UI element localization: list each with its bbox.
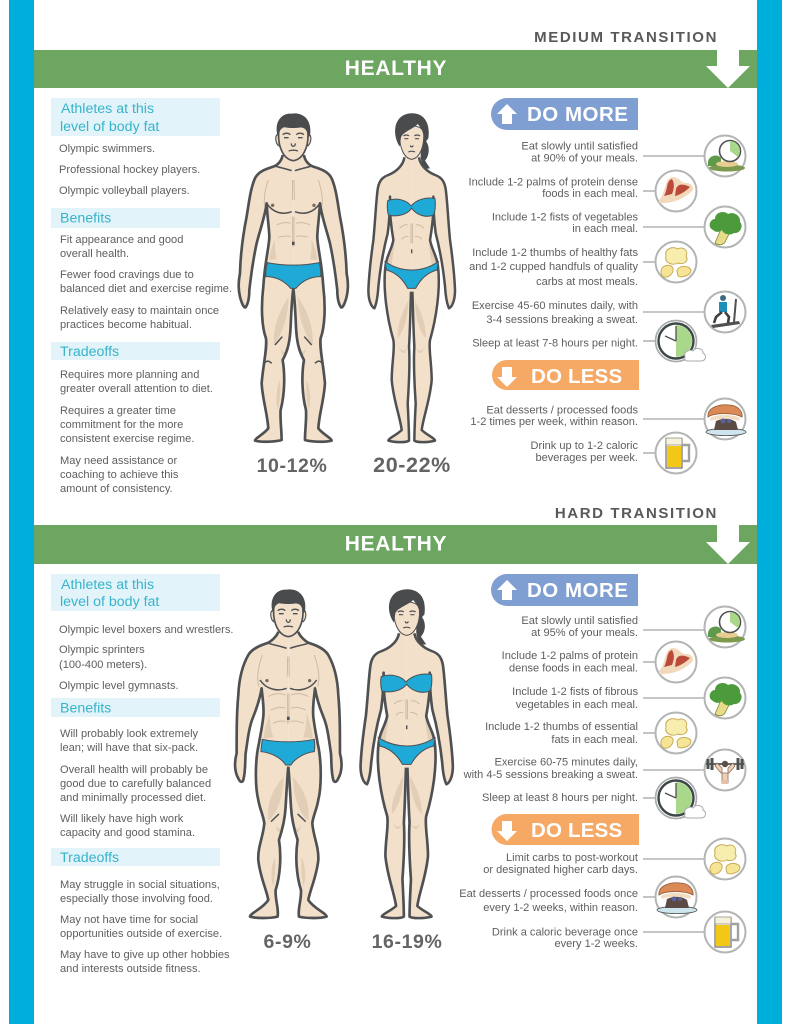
- do less items: Eat desserts / processed foods once: [459, 888, 638, 900]
- do more items: with 4-5 sessions breaking a sweat.: [463, 769, 638, 781]
- left column: athletes: Olympic volleyball players.: [59, 185, 190, 197]
- label: male body fat: 6-9%: [264, 931, 311, 953]
- left column: benefits: overall health.: [60, 248, 129, 260]
- do less items: Eat desserts / processed foods: [486, 404, 638, 416]
- icon: steak: [656, 642, 696, 682]
- do less items: [459, 838, 746, 952]
- icon: sleep clock: [656, 320, 705, 362]
- icon: broccoli: [704, 678, 746, 718]
- left column: tradeoffs: especially those involving food.: [60, 893, 213, 905]
- icon: steak: [656, 170, 696, 212]
- left column: tradeoffs: Requires more planning and: [60, 369, 199, 381]
- label: male body fat: 10-12%: [257, 455, 327, 477]
- left column: benefits: Benefits: [60, 700, 111, 716]
- left column: tradeoffs: coaching to achieve this: [60, 469, 179, 481]
- left column: athletes: Olympic level gymnasts.: [59, 680, 179, 692]
- label: female body fat: 16-19%: [372, 931, 442, 953]
- arrow: transition down: [706, 525, 750, 564]
- left column: tradeoffs: Tradeoffs: [60, 850, 119, 866]
- left column: tradeoffs: Tradeoffs: [60, 344, 119, 360]
- figure: male 6-9%: [235, 589, 342, 918]
- do less items: every 1-2 weeks.: [554, 938, 638, 950]
- heading: hard transition: HARD TRANSITION: [555, 505, 718, 522]
- left column: benefits: good due to carefully balanced: [60, 778, 211, 790]
- left column: benefits: capacity and good stamina.: [60, 827, 195, 839]
- do less pill: DO LESS: [531, 819, 622, 842]
- icon: cauliflower: [704, 838, 746, 880]
- do more items: Include 1-2 thumbs of essential: [485, 721, 638, 733]
- do less pill: [491, 814, 639, 845]
- do more items: [463, 606, 746, 818]
- left column: benefits: lean; will have that six-pack.: [60, 742, 198, 754]
- do more items: Eat slowly until satisfied: [521, 615, 638, 627]
- do more items: carbs at most meals.: [536, 276, 638, 288]
- banner: healthy: HEALTHY: [345, 532, 447, 556]
- left column: benefits: Will probably look extremely: [60, 728, 199, 740]
- figure: female 20-22%: [368, 113, 455, 442]
- icon: desserts: [656, 876, 697, 918]
- left column: tradeoffs: May need assistance or: [60, 455, 177, 467]
- do more items: Include 1-2 palms of protein: [502, 650, 638, 662]
- right blue side bar: [757, 0, 782, 1024]
- do more items: at 90% of your meals.: [531, 152, 638, 164]
- do less pill: [492, 360, 639, 390]
- icon: cauliflower: [656, 242, 696, 282]
- left column: tradeoffs: May have to give up other hobbies: [60, 949, 230, 961]
- left column: benefits: balanced diet and exercise regime.: [60, 283, 232, 295]
- left column: tradeoffs: May not have time for social: [60, 914, 198, 926]
- icon: sleep clock: [656, 778, 705, 818]
- left column: athletes: [51, 574, 233, 692]
- do more items: [468, 136, 746, 362]
- do more items: Sleep at least 8 hours per night.: [482, 792, 638, 804]
- do more items: at 95% of your meals.: [531, 627, 638, 639]
- left column: tradeoffs: consistent exercise regime.: [60, 433, 194, 445]
- do more pill: DO MORE: [527, 579, 628, 602]
- left column: athletes: Olympic level boxers and wrestlers.: [59, 624, 233, 636]
- icon: clock on plate: [704, 136, 746, 176]
- banner: healthy: [34, 525, 757, 564]
- left column: benefits: [51, 208, 232, 331]
- do more items: Exercise 60-75 minutes daily,: [495, 756, 638, 768]
- do more items: vegetables in each meal.: [516, 699, 638, 711]
- banner: healthy: HEALTHY: [345, 57, 447, 80]
- left column: benefits: practices become habitual.: [60, 319, 192, 331]
- do more pill: DO MORE: [527, 103, 628, 126]
- do less items: beverages per week.: [535, 452, 638, 464]
- icon: weightlifter: [704, 750, 746, 790]
- label: female body fat: 20-22%: [373, 453, 451, 477]
- do less items: every 1-2 weeks, within reason.: [483, 902, 638, 914]
- do more pill: [491, 574, 638, 606]
- left column: benefits: Overall health will probably be: [60, 764, 208, 776]
- left column: athletes: level of body fat: [60, 119, 159, 135]
- do more items: fats in each meal.: [551, 734, 638, 746]
- left column: athletes: Athletes at this: [61, 101, 154, 117]
- icon: broccoli: [704, 206, 746, 248]
- do more items: Exercise 45-60 minutes daily, with: [472, 300, 638, 312]
- do more items: Include 1-2 fists of vegetables: [492, 212, 638, 224]
- arrow: transition down: [706, 50, 750, 88]
- do less items: or designated higher carb days.: [483, 864, 638, 876]
- icon: beer: [704, 912, 746, 952]
- left column: benefits: Will likely have high work: [60, 813, 184, 825]
- do more items: in each meal.: [572, 223, 638, 235]
- do less items: Limit carbs to post-workout: [506, 852, 638, 864]
- do less items: Drink a caloric beverage once: [492, 926, 638, 938]
- figure: female 16-19%: [361, 589, 453, 918]
- do more items: Eat slowly until satisfied: [521, 140, 638, 152]
- left blue side bar: [9, 0, 34, 1024]
- left column: athletes: Olympic sprinters: [59, 644, 145, 656]
- left column: benefits: [51, 698, 220, 839]
- icon: treadmill runner: [704, 292, 746, 332]
- left column: athletes: (100-400 meters).: [59, 659, 147, 671]
- icon: cauliflower: [656, 712, 696, 754]
- heading: medium transition: MEDIUM TRANSITION: [534, 29, 718, 46]
- banner: healthy: [34, 50, 757, 88]
- do more items: 3-4 sessions breaking a sweat.: [486, 314, 638, 326]
- do less pill: DO LESS: [531, 365, 622, 388]
- left column: benefits: and minimally processed diet.: [60, 792, 206, 804]
- left column: tradeoffs: commitment for the more: [60, 419, 183, 431]
- icon: clock on plate: [704, 606, 746, 648]
- do more items: dense foods in each meal.: [509, 662, 638, 674]
- panel: medium transition healthy: [34, 29, 757, 495]
- do more pill: [491, 98, 638, 130]
- left column: tradeoffs: and interests outside fitness.: [60, 963, 201, 975]
- do more items: and 1-2 cupped handfuls of quality: [469, 261, 638, 273]
- left column: athletes: level of body fat: [60, 594, 159, 610]
- left column: tradeoffs: opportunities outside of exercise.: [60, 928, 222, 940]
- icon: desserts: [704, 398, 746, 440]
- do more items: foods in each meal.: [542, 188, 638, 200]
- left column: benefits: Fewer food cravings due to: [60, 269, 194, 281]
- do less items: [470, 398, 746, 474]
- left column: tradeoffs: Requires a greater time: [60, 405, 176, 417]
- icon: beer: [656, 432, 696, 474]
- left column: athletes: [51, 98, 220, 197]
- left column: tradeoffs: amount of consistency.: [60, 483, 173, 495]
- left column: tradeoffs: greater overall attention to diet.: [60, 383, 213, 395]
- left column: athletes: Athletes at this: [61, 577, 154, 593]
- left column: tradeoffs: [51, 342, 220, 495]
- left column: tradeoffs: [51, 848, 230, 975]
- do less items: 1-2 times per week, within reason.: [470, 416, 638, 428]
- left column: benefits: Fit appearance and good: [60, 234, 183, 246]
- panel: hard transition healthy: [34, 505, 757, 975]
- do less items: Drink up to 1-2 caloric: [531, 440, 638, 452]
- left column: benefits: Relatively easy to maintain once: [60, 305, 219, 317]
- do more items: Include 1-2 palms of protein dense: [468, 176, 638, 188]
- figure: male 10-12%: [239, 113, 348, 442]
- do more items: Sleep at least 7-8 hours per night.: [472, 338, 638, 350]
- left column: benefits: Benefits: [60, 210, 111, 226]
- do more items: Include 1-2 thumbs of healthy fats: [472, 247, 638, 259]
- left column: athletes: Olympic swimmers.: [59, 143, 155, 155]
- do more items: Include 1-2 fists of fibrous: [512, 686, 638, 698]
- left column: tradeoffs: May struggle in social situations,: [60, 879, 220, 891]
- left column: athletes: Professional hockey players.: [59, 164, 200, 176]
